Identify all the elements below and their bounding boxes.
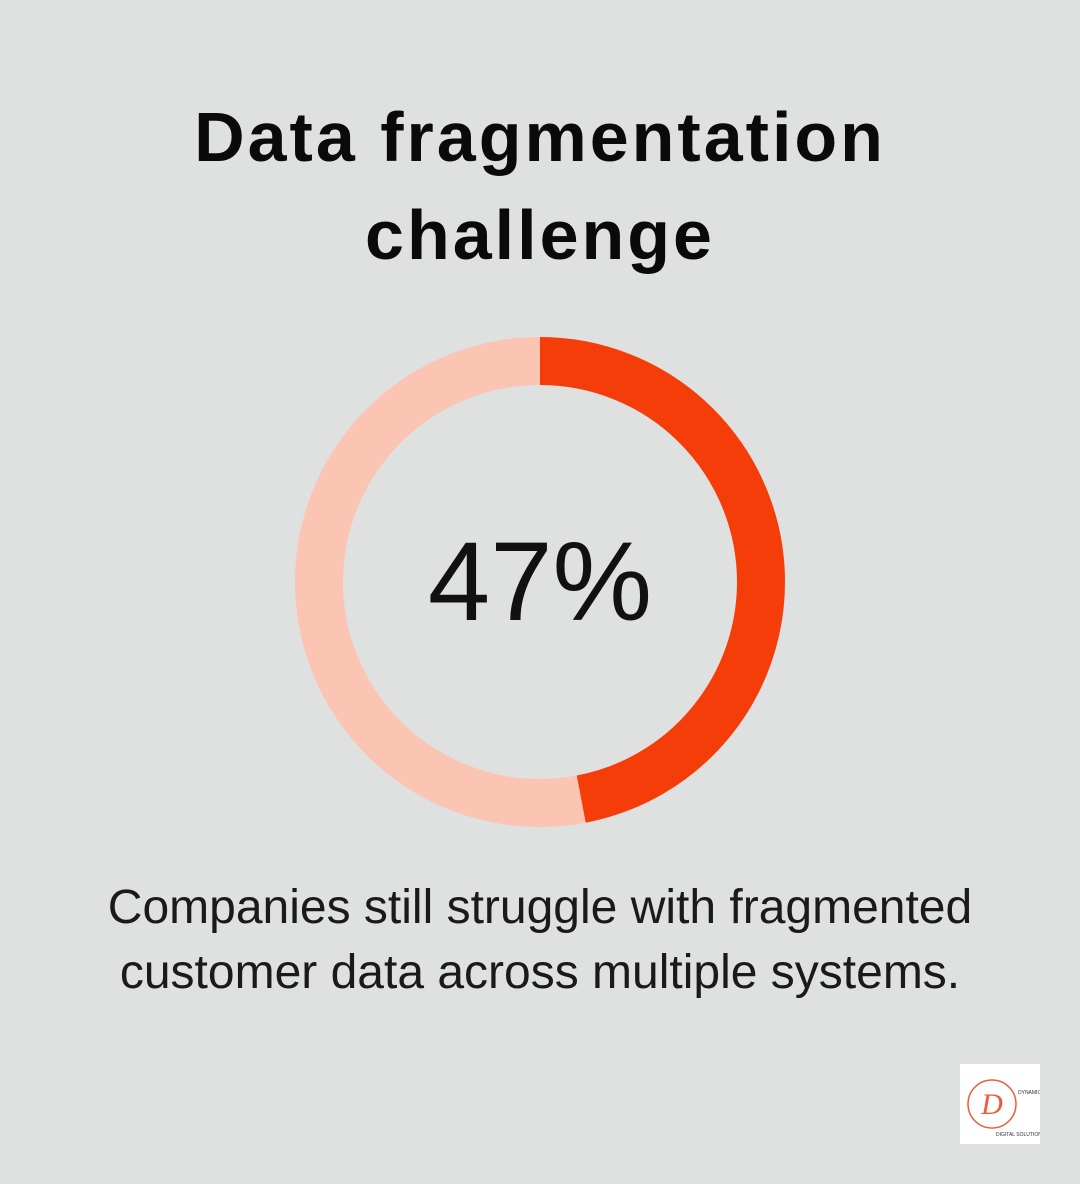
- description text: customer data across multiple systems.: [120, 946, 960, 999]
- description text: Companies still struggle with fragmented: [108, 881, 972, 934]
- logo: [960, 1064, 1040, 1144]
- percentage label: 47%: [428, 519, 652, 644]
- title: [194, 98, 886, 274]
- logo: D: [980, 1088, 1003, 1121]
- donut chart: [295, 337, 785, 827]
- description text: [108, 881, 972, 999]
- title: Data fragmentation: [194, 98, 886, 176]
- title: challenge: [365, 196, 715, 274]
